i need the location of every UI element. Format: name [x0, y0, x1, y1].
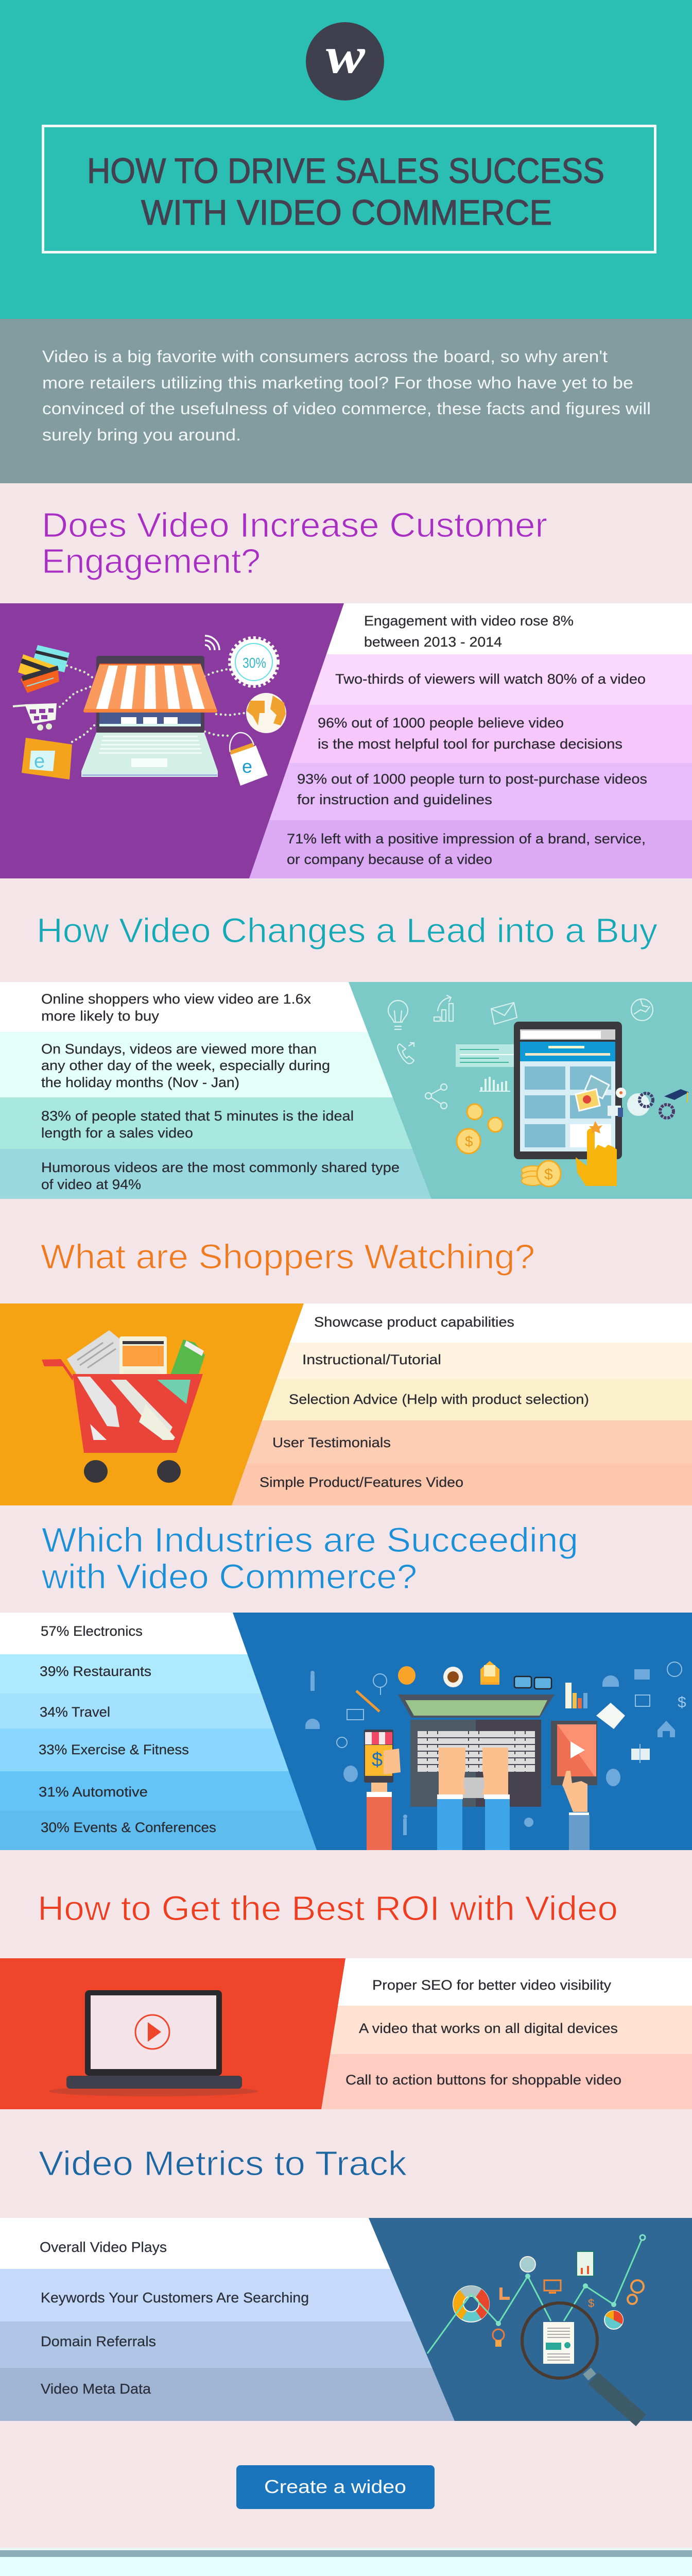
panel: ROI tips: Proper SEO for better video visibility — [372, 1977, 612, 1993]
trend line — [427, 2235, 645, 2353]
chat lines block — [456, 1044, 514, 1067]
panel: industries list: 33% Exercise & Fitness — [39, 1742, 189, 1757]
panel: lead facts: Humorous videos are the most commonly shared type — [41, 1160, 400, 1175]
icon: credit cards — [18, 645, 70, 693]
panel: engagement facts: Engagement with video rose 8% — [364, 613, 574, 629]
icon: magnifier handle — [587, 2371, 641, 2420]
logo: w — [326, 27, 366, 84]
panel: industries list: 57% Electronics — [41, 1623, 143, 1639]
heading: customer engagement: Engagement? — [42, 542, 261, 581]
phone in hand: $ — [372, 1749, 383, 1771]
phone in hand — [364, 1730, 401, 1850]
illustration: analytics and magnifier — [427, 2235, 645, 2420]
panel: lead facts: 83% of people stated that 5 minutes is the ideal — [41, 1108, 354, 1124]
panel: shopper video types — [0, 1303, 692, 1505]
heading: succeeding industries: Which Industries are Succeeding — [42, 1521, 578, 1560]
panel: industries list: 34% Travel — [40, 1704, 110, 1720]
panel: engagement facts: 71% left with a positive impression of a brand, service, — [287, 831, 646, 846]
icon: 30 percent badge: 30% — [243, 655, 266, 671]
laptop — [398, 1694, 555, 1807]
intro panel: convinced of the usefulness of video commerce, these facts and figures will — [42, 399, 651, 418]
panel: engagement facts: between 2013 - 2014 — [364, 634, 502, 650]
panel: industries list — [0, 1613, 692, 1850]
intro panel — [0, 319, 692, 483]
illustration: red shopping cart — [42, 1330, 205, 1483]
panel: ROI tips: Call to action buttons for shoppable video — [345, 2072, 621, 2088]
panel: ROI tips — [0, 1958, 692, 2109]
icon: stacked coins — [522, 1161, 561, 1187]
icon: globe outline — [631, 999, 653, 1021]
panel: engagement facts — [0, 603, 692, 878]
illustration: laptop storefront — [13, 636, 286, 786]
panel: lead facts: of video at 94% — [41, 1177, 141, 1192]
panel: metrics list: Overall Video Plays — [40, 2239, 167, 2255]
icon: light bulb — [388, 1001, 408, 1029]
icon: coins — [457, 1104, 503, 1154]
small metric icons — [493, 2251, 644, 2347]
panel: metrics list: Keywords Your Customers Are Searching — [41, 2290, 309, 2306]
icon: wifi — [205, 636, 219, 650]
report document — [543, 2322, 574, 2364]
title box: WITH VIDEO COMMERCE — [141, 193, 552, 232]
icon: share — [425, 1084, 447, 1109]
icon: telephone — [397, 1043, 414, 1064]
header panel — [0, 0, 692, 319]
icon: coins: $ — [465, 1133, 473, 1149]
panel: engagement facts: or company because of a video — [287, 852, 492, 867]
heading: best ROI: How to Get the Best ROI with Video — [38, 1889, 618, 1928]
tablet with play — [551, 1721, 597, 1850]
call to action button — [236, 2465, 435, 2509]
icon: shopping cart — [13, 703, 57, 731]
small icons — [305, 1661, 686, 1835]
illustration: phone with coins and icons — [388, 995, 689, 1187]
heading: shoppers watching: What are Shoppers Watching? — [41, 1238, 535, 1276]
logo — [306, 22, 384, 100]
icon: growth chart — [434, 995, 453, 1021]
intro panel: more retailers utilizing this marketing tool? For those who have yet to be — [42, 374, 633, 392]
phone device — [514, 1022, 622, 1159]
small icons: $ — [678, 1694, 686, 1711]
panel: shopper video types: Instructional/Tutorial — [302, 1352, 441, 1367]
icon: ecommerce book: e — [34, 751, 45, 772]
icon: pointing hand — [576, 1121, 617, 1186]
panel: metrics list — [0, 2218, 692, 2421]
heading: customer engagement — [42, 506, 547, 581]
icon: shopping bag: e — [242, 756, 252, 777]
panel: engagement facts: Two-thirds of viewers will watch 80% of a video — [335, 671, 646, 687]
call to action button: Create a wideo — [264, 2476, 406, 2497]
panel: metrics list: Video Meta Data — [41, 2381, 151, 2397]
panel: lead facts: length for a sales video — [41, 1125, 193, 1141]
icon: gears and cap — [608, 1088, 689, 1118]
icon: 30 percent badge — [230, 638, 278, 686]
icon: play button — [135, 2015, 169, 2049]
panel: engagement facts: for instruction and guidelines — [297, 792, 492, 807]
icon: bar graph — [479, 1077, 510, 1092]
small metric icons: $ — [588, 2297, 594, 2310]
donut chart — [453, 2286, 489, 2322]
hands and sleeves — [437, 1748, 510, 1850]
heading: succeeding industries: with Video Commerce? — [41, 1557, 417, 1596]
title box — [43, 126, 655, 252]
magnifier lens — [522, 2303, 597, 2378]
icon: floating photos — [576, 1076, 609, 1111]
intro panel: Video is a big favorite with consumers across the board, so why aren't — [42, 347, 608, 366]
panel: engagement facts: 96% out of 1000 people believe video — [318, 715, 564, 731]
panel: shopper video types: User Testimonials — [272, 1435, 391, 1450]
icon: shopping bag — [230, 733, 268, 786]
panel: shopper video types: Simple Product/Features Video — [260, 1475, 463, 1490]
intro panel: surely bring you around. — [42, 426, 241, 444]
icon: envelope — [491, 1003, 517, 1024]
illustration: laptop with play button — [49, 1990, 258, 2096]
panel: shopper video types: Selection Advice (Help with product selection) — [289, 1392, 589, 1407]
heading: lead into a buy: How Video Changes a Lead into a Buy — [37, 911, 658, 950]
heading: succeeding industries — [41, 1521, 578, 1596]
icon: globe — [246, 693, 286, 733]
panel: lead facts — [0, 982, 692, 1199]
panel: lead facts: more likely to buy — [41, 1008, 160, 1024]
panel: lead facts: any other day of the week, especially during — [41, 1058, 330, 1073]
title box: HOW TO DRIVE SALES SUCCESS — [87, 151, 604, 191]
panel: industries list: 39% Restaurants — [40, 1664, 151, 1679]
panel: lead facts: the holiday months (Nov - Jan) — [41, 1075, 239, 1090]
illustration: laptop with hands — [305, 1661, 686, 1850]
heading: metrics: Video Metrics to Track — [39, 2144, 407, 2183]
panel: metrics list: Domain Referrals — [41, 2333, 156, 2349]
panel: engagement facts: 93% out of 1000 people turn to post-purchase videos — [297, 771, 647, 787]
icon: ecommerce book — [22, 738, 72, 779]
panel: lead facts: Online shoppers who view video are 1.6x — [41, 991, 312, 1007]
panel: engagement facts: is the most helpful tool for purchase decisions — [318, 736, 622, 752]
heading: customer engagement: Does Video Increase Customer — [42, 506, 547, 545]
panel: lead facts: On Sundays, videos are viewed more than — [41, 1041, 317, 1057]
panel: ROI tips: A video that works on all digital devices — [359, 2021, 618, 2036]
sources panel — [0, 2548, 692, 2576]
panel: industries list: 31% Automotive — [39, 1784, 148, 1800]
panel: industries list: 30% Events & Conferences — [41, 1820, 216, 1835]
panel: shopper video types: Showcase product capabilities — [314, 1314, 514, 1330]
icon: stacked coins: $ — [544, 1166, 553, 1183]
